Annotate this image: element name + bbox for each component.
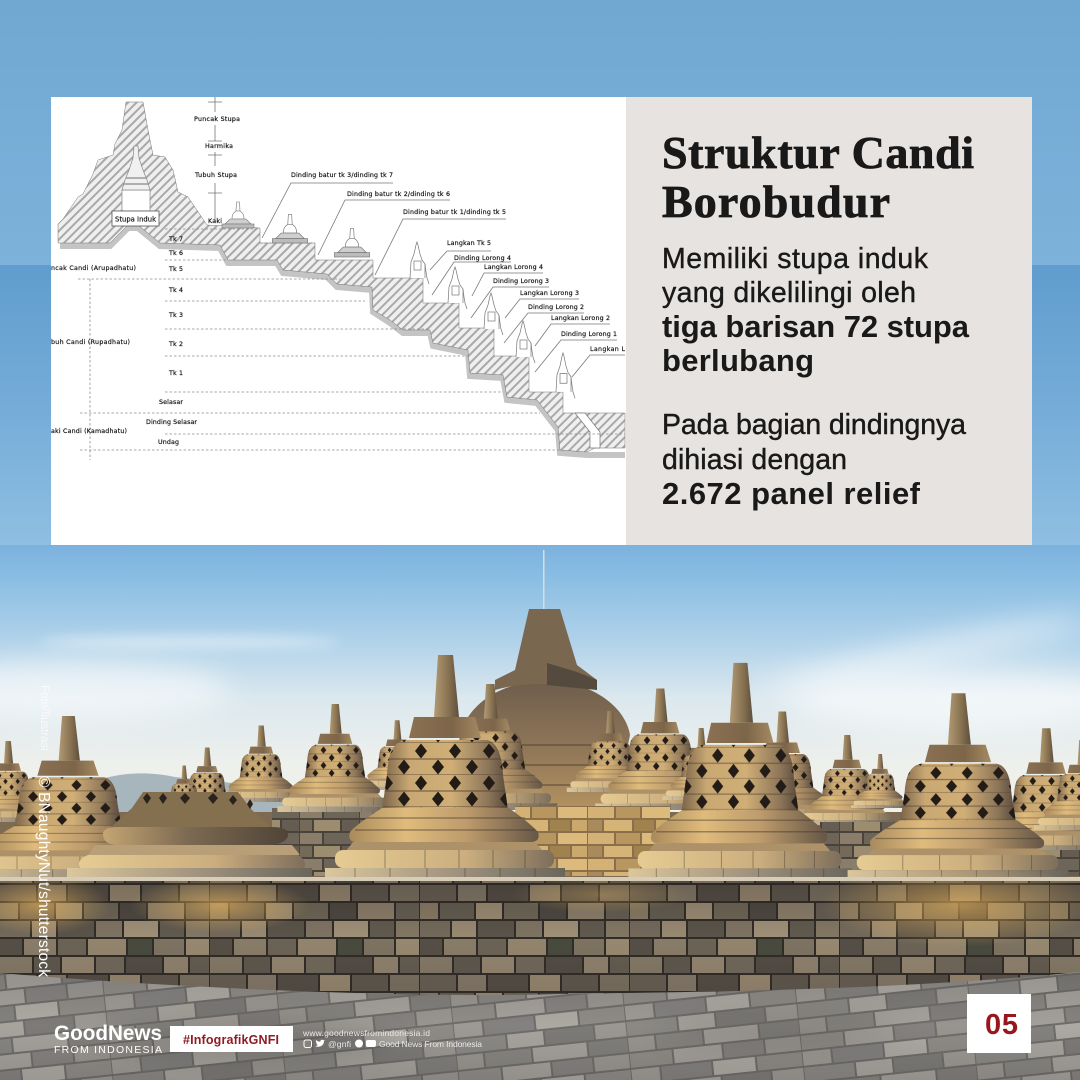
- heading: Struktur Candi: [662, 127, 974, 178]
- mid stupa left: [277, 704, 393, 812]
- stone filler behind stupas: [0, 812, 1080, 880]
- hashtag badge: #InfografikGNFI: [183, 1033, 279, 1047]
- open stupa left: [67, 792, 312, 880]
- diagram labels: Dinding Lorong 3: [493, 278, 549, 285]
- text: relief description: [662, 409, 966, 511]
- diagram labels: Tk 7: [168, 236, 183, 243]
- balustrade towers: [410, 242, 575, 398]
- stone paved ground: [0, 972, 1080, 1080]
- page number: 05: [985, 1009, 1018, 1041]
- diagram labels: Dinding Selasar: [146, 419, 197, 426]
- page number: [967, 994, 1031, 1053]
- diagram labels: Langkan Lorong 2: [551, 315, 610, 322]
- text: stupa description: berlubang: [662, 343, 814, 378]
- logo: GoodNews from Indonesia: [54, 1022, 162, 1056]
- diagram labels: aki Candi (Kamadhatu): [51, 428, 127, 435]
- diagram labels: ncak Candi (Arupadhatu): [51, 265, 136, 272]
- text: relief description: Pada bagian dindingnya: [662, 409, 966, 441]
- website and social links: @gnfi: [328, 1039, 351, 1049]
- central stupa outline: [122, 146, 150, 211]
- icon: twitter: [315, 1040, 325, 1047]
- passage detail: [575, 413, 600, 448]
- diagram labels: Selasar: [159, 399, 183, 406]
- diagram labels: Langkan Tk 5: [447, 240, 491, 247]
- diagram labels: Undag: [158, 439, 179, 446]
- website and social links: [302, 1028, 482, 1049]
- diagram labels: Dinding batur tk 3/dinding tk 7: [291, 172, 393, 179]
- text: relief description: 2.672 panel relief: [662, 476, 921, 511]
- background: lower sky with clouds: [0, 545, 1080, 885]
- text: stupa description: tiga barisan 72 stupa: [662, 309, 970, 344]
- diagram labels: Tk 4: [168, 287, 183, 294]
- chart: cross-section diagram of Borobudur: [51, 97, 625, 460]
- diagram labels: Tk 1: [168, 370, 183, 377]
- icon: instagram: [304, 1040, 312, 1048]
- diagram labels: Dinding Lorong 1: [561, 331, 617, 338]
- panel: diagram background: [51, 97, 626, 545]
- hashtag badge: [170, 1026, 293, 1052]
- diagram labels: Tk 3: [168, 312, 183, 319]
- rubble foundation line: [60, 228, 625, 455]
- diagram labels: Langkan L: [590, 346, 625, 353]
- diagram labels: Puncak Stupa: [194, 116, 240, 123]
- stupa front centre: [325, 655, 565, 880]
- back stupas: [0, 741, 51, 822]
- diagram labels: Langkan Lorong 3: [520, 290, 579, 297]
- heading: [662, 127, 974, 227]
- back terrace walls: [272, 808, 372, 876]
- panel: description text: [626, 97, 1032, 545]
- background: upper sky band: [0, 0, 1080, 265]
- text: relief description: dihiasi dengan: [662, 444, 847, 476]
- diagram labels: buh Candi (Rupadhatu): [51, 339, 130, 346]
- photo credit: © BNaughtyNut/shutterstock: [35, 776, 52, 977]
- diagram labels: Dinding batur tk 1/dinding tk 5: [403, 209, 506, 216]
- hatched temple section: [58, 102, 625, 452]
- diagram labels: Dinding Lorong 2: [528, 304, 584, 311]
- label: Stupa Induk: Stupa Induk: [115, 216, 156, 224]
- photo credit: [35, 685, 52, 977]
- text: stupa description: Memiliki stupa induk: [662, 243, 929, 275]
- text: stupa description: yang dikelilingi oleh: [662, 277, 916, 309]
- diagram labels: Tubuh Stupa: [194, 172, 237, 179]
- logo: GoodNews from Indonesia: GoodNews: [54, 1022, 162, 1045]
- icon: facebook: [355, 1040, 363, 1048]
- distant mountain: [105, 773, 300, 830]
- icon: youtube: [366, 1040, 376, 1047]
- heading: Borobudur: [662, 176, 890, 227]
- level dashed lines: [78, 229, 625, 460]
- central main stupa: [465, 550, 630, 810]
- diagram labels: Langkan Lorong 4: [484, 264, 543, 271]
- photo: Borobudur temple stupas: [0, 550, 1080, 1080]
- diagram labels: [51, 116, 625, 446]
- stupa front right centre: [628, 663, 852, 880]
- website and social links: Good News From Indonesia: [379, 1039, 482, 1049]
- front brick wall: [0, 863, 1080, 998]
- diagram labels: Tk 6: [168, 250, 183, 257]
- website and social links: www.goodnewsfromindonesia.id: [302, 1028, 430, 1038]
- diagram labels: Harmika: [205, 143, 233, 150]
- photo credit: Foto/Ilustrasi: [38, 685, 50, 751]
- stupa far left: [0, 716, 170, 878]
- diagram labels: Tk 5: [168, 266, 183, 273]
- leader lines: [262, 183, 625, 377]
- text: stupa description: [662, 243, 970, 378]
- background: middle sky band: [0, 265, 1080, 547]
- measure axis for the main stupa: [208, 97, 222, 222]
- logo: GoodNews from Indonesia: FROM INDONESIA: [54, 1044, 162, 1056]
- diagram labels: Tk 2: [168, 341, 183, 348]
- small stupas: [222, 202, 370, 257]
- stupa front right: [848, 693, 1068, 880]
- diagram labels: Dinding Lorong 4: [454, 255, 511, 262]
- diagram labels: Kaki: [208, 218, 222, 225]
- diagram labels: Dinding batur tk 2/dinding tk 6: [347, 191, 450, 198]
- label: Stupa Induk: [112, 211, 159, 226]
